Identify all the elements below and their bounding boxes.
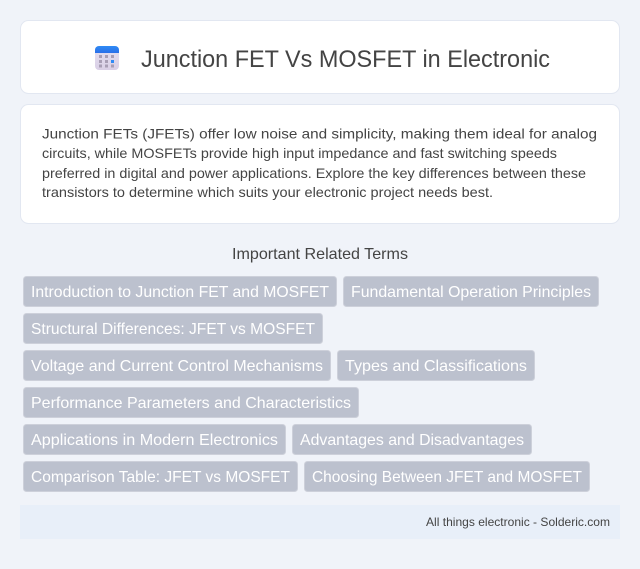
section heading: Important Related Terms xyxy=(232,246,408,263)
chip: applications: Applications in Modern Electronics xyxy=(31,432,278,449)
chip: fundamentals: Fundamental Operation Principles xyxy=(351,284,591,301)
chip: advantages xyxy=(292,424,532,454)
chip: performance xyxy=(24,388,358,418)
intro text: circuits, while MOSFETs provide high input impedance and fast switching speeds xyxy=(42,145,557,161)
chip: types xyxy=(338,350,534,380)
intro text: Junction FETs (JFETs) offer low noise and simplicity, making them ideal for analog xyxy=(42,126,597,142)
intro panel xyxy=(20,104,620,224)
chip: voltage and current: Voltage and Current Control Mechanisms xyxy=(31,358,323,375)
chip: choosing: Choosing Between JFET and MOSFET xyxy=(312,469,582,486)
footer bar xyxy=(20,505,620,539)
chip: advantages: Advantages and Disadvantages xyxy=(300,432,524,449)
title: Junction FET Vs MOSFET in Electronic xyxy=(141,46,550,73)
chip: applications xyxy=(24,424,286,454)
chip: structural: Structural Differences: JFET vs MOSFET xyxy=(31,321,315,338)
icon: calendar xyxy=(95,46,119,70)
chip: types: Types and Classifications xyxy=(345,358,527,375)
footer text: All things electronic - Solderic.com xyxy=(426,515,610,529)
chip: fundamentals xyxy=(344,276,598,306)
chip: voltage and current xyxy=(24,350,330,380)
chip: structural xyxy=(24,314,322,344)
intro text xyxy=(42,126,597,200)
related terms chips xyxy=(24,276,598,492)
chip: introduction: Introduction to Junction FET and MOSFET xyxy=(31,284,329,301)
chip: introduction xyxy=(24,276,336,306)
header panel xyxy=(20,20,620,94)
intro text: preferred in digital and power applications. Explore the key differences between these xyxy=(42,165,586,181)
chip: comparison: Comparison Table: JFET vs MOSFET xyxy=(31,469,290,486)
intro text: transistors to determine which suits your electronic project needs best. xyxy=(42,184,493,200)
chip: choosing xyxy=(304,462,590,492)
chip: comparison xyxy=(24,462,298,492)
chip: performance: Performance Parameters and Characteristics xyxy=(31,395,351,412)
